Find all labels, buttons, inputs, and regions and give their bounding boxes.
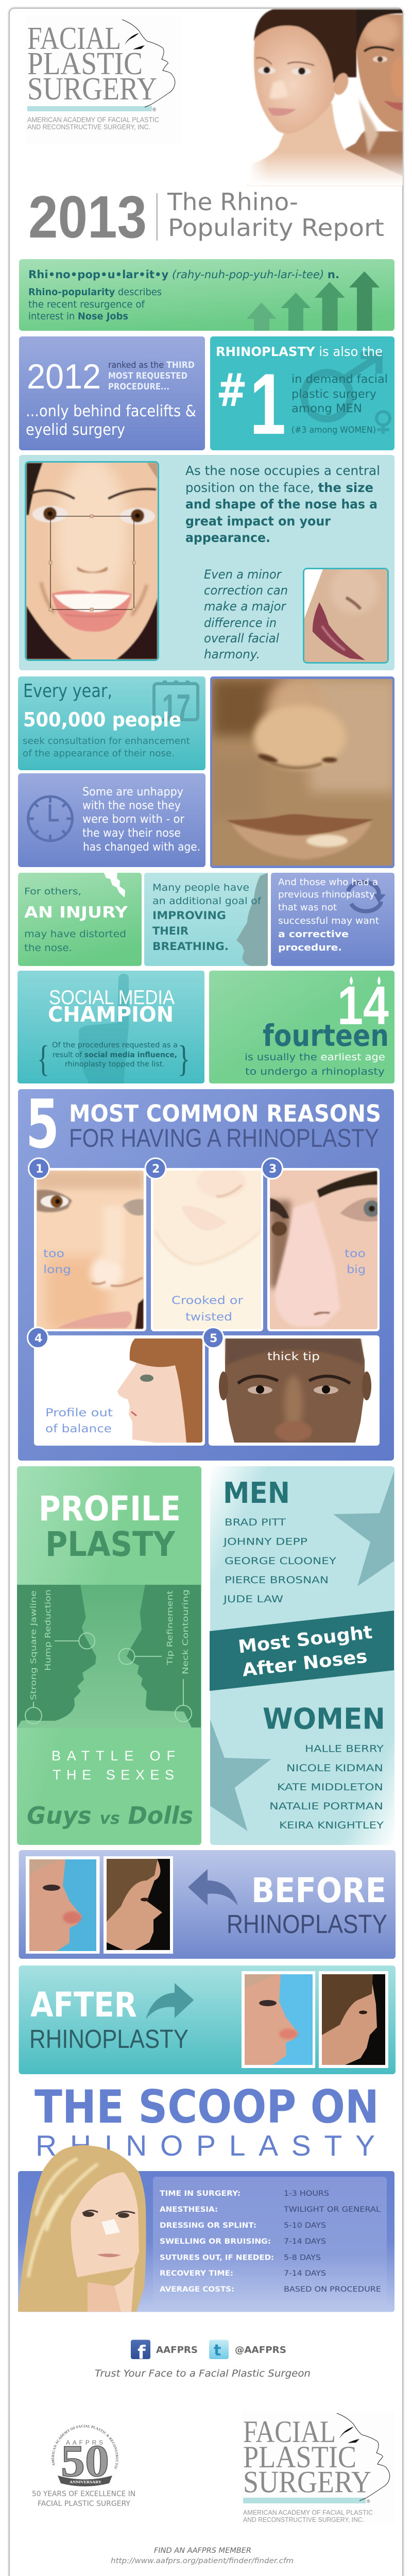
panel: 2012 third most requested: 2012 (27, 357, 101, 396)
panel: corrective procedure: previous rhinoplasty (278, 890, 375, 900)
photo: before profile blue background (26, 1856, 100, 1954)
facts table: AVERAGE COSTS: (160, 2285, 234, 2294)
icon: rising arrows (247, 272, 380, 331)
icon: head profile (236, 873, 268, 966)
men list: PIERCE BROSNAN (225, 1574, 329, 1586)
number badges: 1 (36, 1163, 43, 1176)
facts table: RECOVERY TIME: (160, 2269, 233, 2278)
bracketed statement (37, 1038, 190, 1079)
minor correction italic text: correction can (204, 583, 288, 598)
reason 5: thick tip (209, 1335, 380, 1446)
chart: profile silhouettes: Hump Reduction (43, 1589, 53, 1671)
chart: profile silhouettes (17, 1585, 201, 1728)
men list: JOHNNY DEPP (223, 1536, 307, 1548)
reason 4: profile out of balance: of balance (45, 1422, 112, 1435)
photo: after profile blue background (242, 1971, 315, 2068)
reason 4: profile out of balance: Profile out (45, 1406, 113, 1419)
panel: before rhinoplasty: BEFORE (251, 1871, 386, 1910)
heading (26, 1085, 381, 1163)
title: 2013 The Rhino-Popularity Report (28, 183, 384, 250)
reason 3: too big: too (345, 1247, 366, 1260)
panel: after rhinoplasty: RHINOPLASTY (29, 2024, 188, 2054)
logo: AAFPRS 50th anniversary: AMERICAN ACADEMY OF FACIAL PLASTIC & RECONSTRUCTIVE SURGERY (52, 2425, 118, 2470)
panel: fourteen earliest age: is usually the earliest age (245, 1052, 385, 1063)
arrow: back (188, 1869, 238, 1906)
men list: MEN (223, 1477, 290, 1510)
central position text: position on the face, the size (185, 480, 373, 495)
definition text: the recent resurgence of (28, 299, 145, 310)
logo: AAFPRS 50th anniversary: 50 YEARS OF EXCELLENCE IN (32, 2490, 135, 2498)
panel: #1 among men: RHINOPLASTY is also the (216, 344, 383, 359)
panel: every year 500,000 people: 500,000 people (23, 708, 181, 731)
panel: profile plasty (17, 1466, 201, 1845)
icon: twitter (209, 2340, 229, 2360)
panel: social media champion: CHAMPION (48, 1002, 174, 1027)
facts table: 7-14 DAYS (284, 2238, 326, 2246)
panel: 5 most common reasons (18, 1085, 394, 1461)
men list: BRAD PITT (225, 1517, 286, 1528)
panel: corrective procedure: successful may want (278, 916, 379, 926)
chart: profile silhouettes: Strong Square Jawline (29, 1590, 38, 1700)
panel: some are unhappy: has changed with age. (83, 841, 200, 854)
icon: star top (333, 1471, 394, 1586)
facts table: 5-10 DAYS (284, 2222, 326, 2230)
reason 1: too long: long (43, 1263, 71, 1276)
reason 3: too big: big (347, 1263, 366, 1276)
facts table (153, 2177, 387, 2306)
battle of the sexes: Guys vs Dolls (27, 1802, 193, 1829)
logo: Facial Plastic Surgery footer: ® (367, 2499, 370, 2504)
footer: find a member (111, 2547, 294, 2565)
bracketed statement: { (37, 1038, 49, 1079)
women list: KATE MIDDLETON (277, 1782, 383, 1793)
social media links: Trust Your Face to a Facial Plastic Surgeon (95, 2368, 311, 2379)
heading: the scoop on rhinoplasty (35, 2080, 379, 2162)
panel: some are unhappy: the way their nose (82, 827, 181, 840)
panel: #1 among men: among MEN (291, 402, 362, 415)
arrow: forward (146, 1983, 194, 2019)
number badges: 4 (35, 1332, 42, 1345)
banner: Most Sought (237, 1622, 373, 1658)
photo: transform guide (49, 515, 135, 611)
women list (263, 1702, 385, 1831)
battle of the sexes (27, 1748, 193, 1829)
panel: improving their breathing: an additional goal of (152, 895, 262, 907)
panel: after rhinoplasty (19, 1965, 396, 2074)
panel: an injury: AN INJURY (24, 904, 128, 922)
minor correction italic text (204, 567, 288, 662)
panel: 2012 third most requested: PROCEDURE... (108, 382, 169, 392)
definition text: interest in Nose Jobs (28, 311, 128, 322)
facts table: DRESSING OR SPLINT: (160, 2222, 256, 2230)
definition text (28, 286, 162, 322)
panel: #1 among men: 1 (250, 355, 286, 452)
banner: After Noses (241, 1647, 368, 1681)
icon: calendar: 17 (162, 687, 191, 727)
logo: Facial Plastic Surgery footer: AND RECONSTRUCTIVE SURGERY, INC. (243, 2516, 364, 2523)
footer: find a member: http://www.aafprs.org/patient/finder/finder.cfm (111, 2557, 294, 2565)
women list: KEIRA KNIGHTLEY (279, 1820, 384, 1831)
men list: GEORGE CLOONEY (225, 1555, 336, 1567)
panel: improving their breathing: Many people have (152, 882, 249, 893)
reason 1: too long: too (43, 1247, 64, 1260)
social media links: @AAFPRS (235, 2345, 286, 2355)
panel: some are unhappy: were born with - or (82, 813, 185, 826)
panel: before rhinoplasty (19, 1850, 396, 1959)
reason 5: thick tip: thick tip (267, 1350, 320, 1363)
icon: crack (104, 872, 125, 897)
definition heading: Rhi•no•pop•u•lar•it•y (rahy-nuh-pop-yuh-lar-i-tee) n. (28, 268, 339, 281)
logo: AAFPRS 50th anniversary: 50 (61, 2436, 109, 2486)
photo: close-up nose and lips (210, 675, 397, 868)
icon: clock (28, 796, 73, 841)
logo: AAFPRS 50th anniversary: ANNIVERSARY (70, 2480, 102, 2484)
panel: corrective procedure: And those who had a (278, 877, 378, 888)
title: 2013 The Rhino-Popularity Report: Popularity Report (168, 214, 384, 242)
title: 2013 The Rhino-Popularity Report: 2013 (28, 183, 147, 250)
panel: every year 500,000 people: seek consultation for enhancement (23, 736, 190, 747)
minor correction italic text: overall facial (204, 631, 279, 646)
panel: scoop facts (18, 2145, 394, 2312)
central position text: and shape of the nose has a (185, 497, 377, 512)
panel: an injury (18, 872, 142, 966)
banner (210, 1611, 394, 1691)
facts table: TWILIGHT OR GENERAL (283, 2206, 381, 2214)
logo: Facial Plastic Surgery footer: PLASTIC (243, 2440, 356, 2474)
facts table: ANESTHESIA: (160, 2206, 218, 2214)
logo: AAFPRS 50th anniversary: FACIAL PLASTIC SURGERY (38, 2500, 130, 2508)
panel: every year 500,000 people: Every year, (23, 681, 112, 702)
footer: find a member: FIND AN AAFPRS MEMBER (154, 2547, 251, 2555)
women list: WOMEN (263, 1702, 385, 1736)
battle of the sexes: THE SEXES (53, 1767, 174, 1783)
logo: Facial Plastic Surgery: FACIAL (27, 21, 121, 56)
photo: before profile black background (104, 1856, 173, 1954)
facts table: SUTURES OUT, IF NEEDED: (160, 2253, 274, 2262)
logo: Facial Plastic Surgery: ® (152, 107, 157, 113)
men list: JUDE LAW (223, 1594, 283, 1605)
panel: #1 among men: plastic surgery (291, 388, 376, 401)
panel: corrective procedure: a corrective (278, 929, 349, 940)
title: 2013 The Rhino-Popularity Report: The Rhino- (167, 188, 298, 216)
women list: NATALIE PORTMAN (269, 1801, 383, 1812)
men list (223, 1477, 336, 1605)
panel: some are unhappy: with the nose they (82, 800, 181, 812)
women list: NICOLE KIDMAN (286, 1762, 383, 1774)
icon: facebook (131, 2340, 150, 2363)
logo: Facial Plastic Surgery footer: FACIAL (243, 2415, 336, 2449)
reason 2: crooked or twisted: twisted (185, 1311, 232, 1323)
panel: most sought after noses (210, 1466, 394, 1845)
number badges (28, 1158, 283, 1348)
panel: every year 500,000 people: of the appearance of their nose. (23, 748, 175, 759)
bracketed statement: rhinoplasty topped the list. (65, 1060, 165, 1069)
logo: Facial Plastic Surgery footer: AMERICAN ACADEMY OF FACIAL PLASTIC (243, 2509, 373, 2516)
panel: definition (19, 259, 394, 331)
panel: corrective procedure: that was not (278, 903, 337, 913)
photo: after profile black background (319, 1971, 388, 2068)
facts table: 7-14 DAYS (284, 2269, 326, 2278)
reason 2: crooked or twisted: Crooked or (171, 1294, 243, 1307)
minor correction italic text: harmony. (204, 647, 260, 662)
heading: MOST COMMON REASONS (69, 1100, 381, 1127)
logo: Facial Plastic Surgery (26, 15, 181, 144)
panel: profile plasty: PROFILE (39, 1489, 181, 1529)
chart: profile silhouettes: Neck Contouring (181, 1589, 190, 1674)
icon: male symbol (304, 355, 379, 419)
panel: some are unhappy (18, 773, 205, 867)
central position text: As the nose occupies a central (185, 463, 380, 478)
panel: every year 500,000 people (18, 676, 205, 770)
icon: facebook: f (138, 2342, 146, 2363)
reason 3: too big (265, 1165, 381, 1335)
panel: corrective procedure (271, 873, 394, 966)
photo: smiling woman with nose guide (23, 459, 162, 665)
panel: #1 among men: # (216, 364, 247, 417)
photo: blonde woman with nose bandage (18, 2145, 146, 2312)
icon: calendar (154, 681, 198, 727)
panel: 2012 third most requested: MOST REQUESTED (108, 371, 187, 381)
social media links (95, 2340, 311, 2379)
minor correction italic text: make a major (204, 599, 287, 614)
facts table: 1-3 HOURS (284, 2190, 329, 2198)
panel: #1 among men: in demand facial (291, 373, 388, 386)
panel: some are unhappy: Some are unhappy (82, 786, 183, 799)
facts table: BASED ON PROCEDURE (284, 2285, 381, 2294)
panel: an injury: the nose. (24, 942, 72, 954)
panel: improving their breathing: IMPROVING (152, 909, 226, 922)
central position text (185, 463, 380, 545)
panel: improving their breathing: BREATHING. (152, 940, 229, 953)
logo: Facial Plastic Surgery footer: SURGERY (243, 2465, 371, 2499)
logo: AAFPRS 50th anniversary (32, 2425, 135, 2508)
panel: nose central position (19, 455, 394, 670)
panel: fourteen earliest age: to undergo a rhinoplasty (245, 1066, 385, 1077)
bracketed statement: result of social media influence, (53, 1051, 177, 1059)
panel: fourteen earliest age (209, 971, 394, 1083)
logo: Facial Plastic Surgery: PLASTIC (27, 46, 143, 81)
reason 4: profile out of balance (34, 1335, 205, 1446)
icon: star bottom (210, 1719, 271, 1831)
number badges: 3 (269, 1163, 277, 1176)
panel: improving their breathing: THEIR (152, 925, 188, 937)
icon: twitter: t (214, 2342, 221, 2360)
number badges: 2 (152, 1163, 160, 1176)
icon: 14 birthday candles: 14 (337, 975, 389, 1036)
logo: AAFPRS 50th anniversary: AAFPRS (66, 2439, 103, 2446)
photo: nose and lips side view (304, 567, 388, 663)
panel: 2012 third most requested: ...only behind facelifts & (26, 402, 196, 420)
panel: profile plasty: PLASTY (45, 1524, 176, 1564)
reason 1: too long (31, 1165, 149, 1335)
icon: redo arrows (348, 882, 386, 911)
number badges: 5 (210, 1332, 217, 1345)
panel: after rhinoplasty: AFTER (30, 1985, 137, 2025)
bracketed statement: } (178, 1038, 190, 1079)
bracketed statement: Of the procedures requested as a (52, 1041, 178, 1049)
heading: 5 (26, 1085, 59, 1163)
heading: the scoop on rhinoplasty: RHINOPLASTY (36, 2129, 375, 2162)
logo: Facial Plastic Surgery: AND RECONSTRUCTIVE SURGERY, INC. (27, 123, 150, 131)
facts table: TIME IN SURGERY: (160, 2190, 241, 2198)
reason 2: crooked or twisted (149, 1165, 265, 1335)
panel: an injury: may have distorted (24, 928, 126, 940)
facts table: 5-8 DAYS (284, 2253, 321, 2262)
panel: corrective procedure: procedure. (278, 943, 342, 953)
women list: HALLE BERRY (305, 1743, 384, 1755)
logo: Facial Plastic Surgery: AMERICAN ACADEMY OF FACIAL PLASTIC (27, 115, 159, 124)
panel: improving their breathing (144, 873, 268, 966)
panel: before rhinoplasty: RHINOPLASTY (227, 1909, 387, 1939)
panel: #1 among men (210, 336, 394, 452)
battle of the sexes: BATTLE OF (52, 1748, 175, 1764)
panel: fourteen earliest age: fourteen (263, 1018, 389, 1053)
central position text: appearance. (185, 530, 270, 545)
social media links: AAFPRS (156, 2345, 198, 2355)
central position text: great impact on your (185, 514, 331, 529)
minor correction italic text: difference in (204, 616, 277, 630)
panel: an injury: For others, (24, 886, 81, 897)
panel: social media champion: SOCIAL MEDIA (49, 987, 175, 1009)
panel: #1 among men: (#3 among WOMEN) (291, 425, 376, 435)
logo: Facial Plastic Surgery: SURGERY (27, 72, 157, 107)
chart: profile silhouettes: Tip Refinement (165, 1590, 175, 1666)
heading: the scoop on rhinoplasty: THE SCOOP ON (35, 2080, 379, 2133)
facts table: SWELLING OR BRUISING: (160, 2238, 271, 2246)
icon: female symbol (376, 412, 390, 434)
minor correction italic text: Even a minor (204, 567, 282, 582)
photo: woman and man faces (247, 9, 407, 185)
definition text: Rhino-popularity describes (28, 286, 162, 298)
logo: Facial Plastic Surgery footer (242, 2411, 394, 2524)
panel: 2012 third most requested (19, 336, 205, 450)
panel: 2012 third most requested: eyelid surgery (26, 421, 125, 439)
icon: pointing hand (79, 974, 129, 1083)
panel: 2012 third most requested: ranked as the THIRD (108, 360, 195, 370)
panel: social media champion (18, 971, 204, 1083)
